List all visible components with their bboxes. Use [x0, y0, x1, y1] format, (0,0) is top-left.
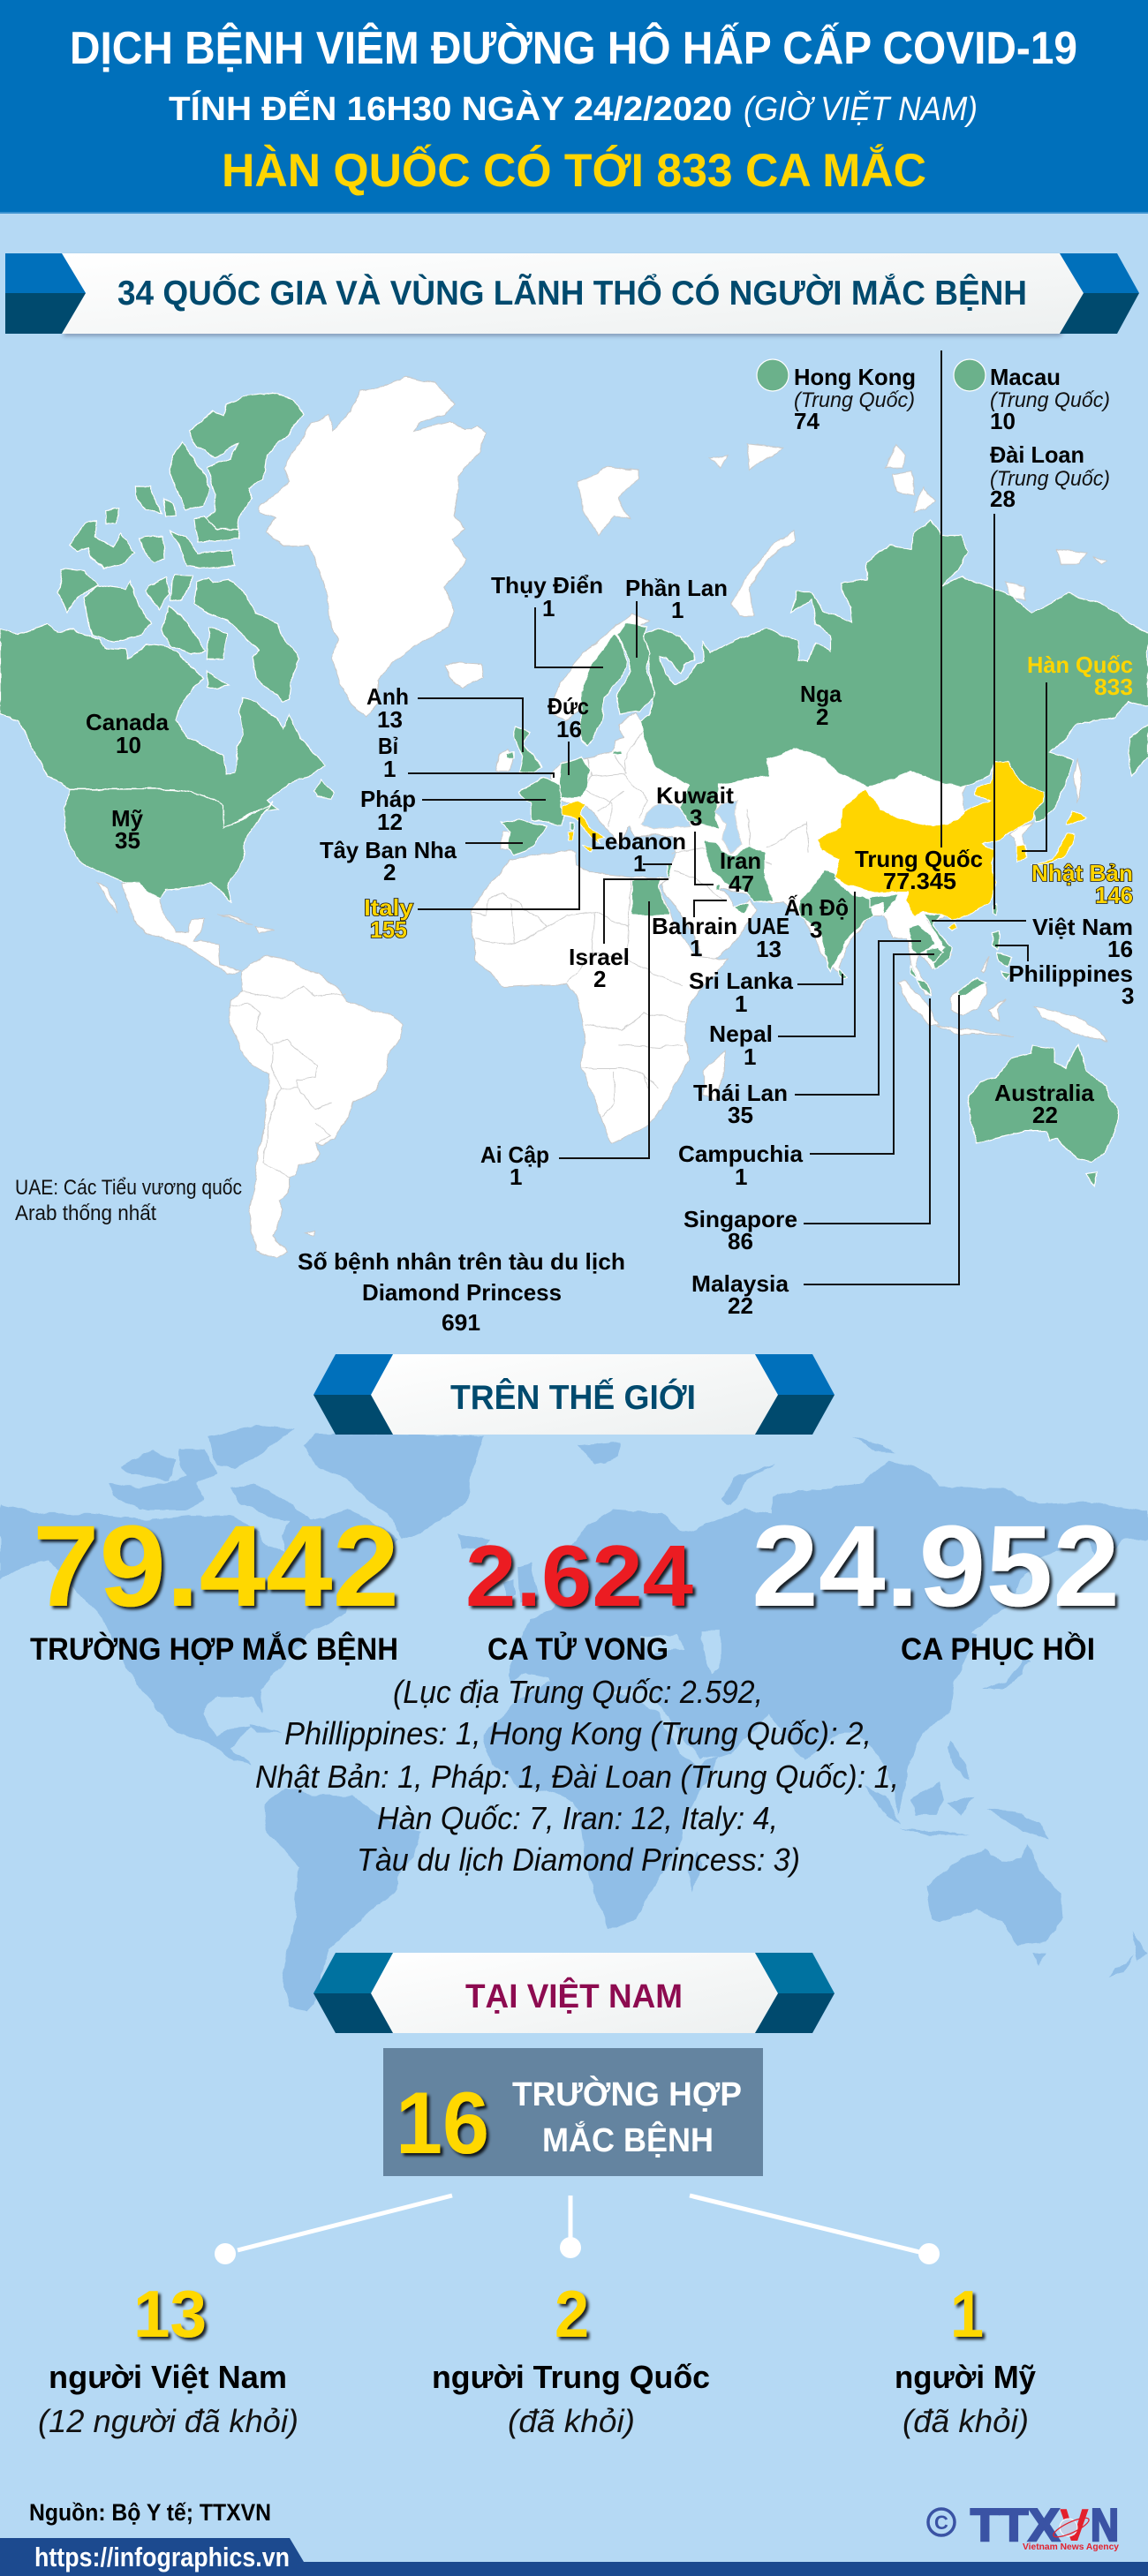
label: Philippines: 3	[1122, 983, 1134, 1009]
label: Diamond Princess	[298, 1248, 625, 1336]
label: Đài Loan	[990, 441, 1110, 909]
label: Canada	[86, 709, 170, 758]
subtitle date: TÍNH ĐẾN 16H30 NGÀY 24/2/2020	[169, 89, 732, 128]
label: Ai Cập: Ai Cập	[480, 1141, 549, 1168]
label: Italy: 155	[370, 916, 407, 943]
label: Đức: 16	[556, 716, 582, 742]
label: Macau	[954, 359, 1110, 434]
label: Mỹ	[111, 805, 144, 854]
label: Israel: Israel	[569, 944, 630, 970]
label: Nhật Bản: 146	[1095, 882, 1133, 908]
Black Sea	[642, 803, 691, 830]
logo: TTXVN: C	[934, 2512, 948, 2534]
header band	[0, 0, 1148, 214]
label: Tây Ban Nha: 2	[383, 859, 396, 885]
label: Pháp: Pháp	[360, 786, 416, 812]
map labels	[15, 350, 1134, 1336]
stat: total cases: TRƯỜNG HỢP MẮC BỆNH	[30, 1631, 398, 1667]
section banner: Vietnam	[313, 1953, 835, 2033]
label: Việt Nam	[932, 914, 1133, 962]
breakdown: Chinese	[432, 2277, 710, 2439]
section banner: world	[313, 1354, 835, 1435]
label: Trung Quốc: Trung Quốc	[855, 846, 983, 872]
label: Hàn Quốc	[1022, 652, 1133, 851]
logo: TTXVN: Vietnam News Agency	[1023, 2542, 1119, 2552]
label: Việt Nam: 16	[1107, 936, 1133, 962]
note: UAE abbreviation: Arab thống nhất	[15, 1201, 156, 1225]
label: Phần Lan: Phần Lan	[625, 575, 728, 601]
label: Macau: (Trung Quốc)	[990, 388, 1110, 412]
label: Nepal: 1	[744, 1043, 756, 1070]
India, Southeast Asia, Taiwan	[799, 870, 1013, 998]
stat: deaths: 2.624	[465, 1527, 693, 1624]
label: Diamond Princess: Diamond Princess	[362, 1279, 562, 1306]
label: Thái Lan: 35	[728, 1102, 753, 1128]
Finland	[616, 623, 655, 715]
label: Iran	[720, 847, 761, 897]
label: Bỉ: 1	[383, 756, 396, 782]
stat: total cases: 79.442	[33, 1501, 399, 1631]
label: Singapore: Singapore	[684, 1206, 797, 1232]
breakdown: Vietnamese: 13	[133, 2277, 207, 2351]
label: Ai Cập: 1	[510, 1164, 522, 1190]
subtitle date	[169, 89, 978, 128]
label: Hong Kong: (Trung Quốc)	[794, 388, 915, 412]
stat: deaths	[465, 1527, 693, 1667]
United States	[64, 789, 273, 902]
label: Lebanon	[591, 828, 686, 877]
UK, Germany, France, Spain, Egypt, Iran	[502, 727, 773, 915]
label: Diamond Princess: Số bệnh nhân trên tàu du lịch	[298, 1248, 625, 1275]
label: UAE: UAE	[747, 913, 789, 939]
label: Lebanon: Lebanon	[591, 828, 686, 855]
label: Đài Loan: Đài Loan	[990, 441, 1084, 468]
label: Anh: 13	[377, 706, 403, 733]
label: Bỉ	[378, 733, 554, 782]
label: Kuwait: 3	[690, 804, 702, 831]
label: Kuwait	[656, 782, 734, 885]
breakdown: Vietnamese: người Việt Nam	[49, 2359, 287, 2395]
breakdown: Chinese: (đã khỏi)	[508, 2403, 635, 2439]
breakdown: American	[895, 2277, 1036, 2439]
breakdown: Vietnamese	[38, 2277, 298, 2439]
label: Anh	[366, 683, 523, 752]
breakdown: Vietnamese: (12 người đã khỏi)	[38, 2403, 298, 2439]
deaths breakdown: Hàn Quốc: 7, Iran: 12, Italy: 4,	[377, 1800, 778, 1836]
label: Mỹ: Mỹ	[111, 805, 144, 832]
Italy	[563, 801, 605, 852]
label: Pháp: 12	[377, 809, 403, 835]
label: Macau: 10	[990, 408, 1016, 434]
section banner: 34 countries: 34 QUỐC GIA VÀ VÙNG LÃNH THỔ CÓ NGƯỜI MẮC BỆNH	[117, 273, 1027, 313]
white land	[97, 377, 1106, 1260]
label: Thái Lan	[693, 941, 921, 1128]
label: Nga	[800, 681, 842, 730]
label: Sri Lanka: Sri Lanka	[689, 968, 794, 994]
deaths breakdown: Phillippines: 1, Hong Kong (Trung Quốc): 2,	[284, 1715, 872, 1751]
deaths breakdown: Tàu du lịch Diamond Princess: 3)	[357, 1842, 800, 1878]
stat: deaths: CA TỬ VONG	[487, 1631, 668, 1667]
total box: 16 cases: 16	[396, 2074, 489, 2172]
label: Bahrain	[652, 900, 737, 961]
label: Italy: Italy	[364, 894, 414, 921]
label: Australia	[994, 1080, 1095, 1128]
label: Đức	[548, 693, 589, 775]
label: Pháp	[360, 786, 546, 835]
label: Ấn Độ	[784, 894, 849, 943]
label: Bỉ: Bỉ	[378, 733, 398, 759]
label: Bahrain: Bahrain	[652, 913, 737, 939]
world map	[0, 377, 1148, 1260]
Russia	[640, 519, 1148, 828]
country borders	[230, 733, 810, 1177]
label: Malaysia: 22	[728, 1292, 753, 1319]
logo: TTXVN: N	[1091, 2500, 1119, 2551]
section banner: Vietnam: TẠI VIỆT NAM	[465, 1977, 683, 2015]
breakdown: Chinese: người Trung Quốc	[432, 2359, 710, 2395]
label: Ấn Độ: Ấn Độ	[784, 894, 849, 921]
label: Hàn Quốc: 833	[1094, 674, 1133, 700]
label: Hong Kong	[757, 359, 916, 434]
Canada and islands	[0, 392, 333, 828]
note: UAE abbreviation: UAE: Các Tiểu vương quốc	[15, 1176, 242, 1200]
Caspian Sea	[715, 801, 742, 852]
label: Israel: 2	[593, 966, 606, 992]
note: UAE abbreviation	[15, 1176, 242, 1225]
breakdown: American: người Mỹ	[895, 2359, 1036, 2395]
label: Malaysia: Malaysia	[691, 1270, 789, 1297]
label: UAE: 13	[756, 936, 782, 962]
label: Bahrain: 1	[690, 935, 702, 961]
label: Tây Ban Nha	[320, 837, 523, 885]
breakdown: American: (đã khỏi)	[903, 2403, 1029, 2439]
label: Malaysia	[691, 995, 959, 1319]
countries with cases	[0, 392, 1148, 1186]
total box: 16 cases: MẮC BỆNH	[542, 2120, 714, 2159]
logo: TTXVN: TTX	[971, 2500, 1060, 2551]
footer bar with URL	[0, 2538, 1148, 2576]
label: Singapore	[684, 998, 930, 1254]
stat: recovered: CA PHỤC HỒI	[901, 1631, 1095, 1667]
label: Philippines: Philippines	[1008, 960, 1133, 987]
label: Hong Kong: Hong Kong	[794, 364, 916, 390]
deaths breakdown	[255, 1674, 899, 1878]
label: Israel	[569, 879, 668, 992]
label: Hàn Quốc: Hàn Quốc	[1027, 652, 1133, 678]
label: Nga: Nga	[800, 681, 842, 707]
section banner: 34 countries	[5, 253, 1139, 334]
world map watermark	[0, 1425, 1148, 2013]
breakdown: American: 1	[950, 2277, 984, 2351]
label: Philippines	[995, 945, 1134, 1009]
label: Campuchia	[678, 954, 934, 1190]
label: Anh: Anh	[366, 683, 409, 710]
deaths breakdown: Nhật Bản: 1, Pháp: 1, Đài Loan (Trung Quốc): 1,	[255, 1759, 899, 1795]
label: UAE	[747, 913, 789, 962]
label: Kuwait: Kuwait	[656, 782, 734, 809]
label: Thụy Điển	[491, 572, 603, 667]
label: Italy	[364, 817, 579, 943]
label: Canada: Canada	[86, 709, 170, 735]
label: Nhật Bản: Nhật Bản	[1031, 860, 1133, 886]
label: Trung Quốc: 77.345	[883, 868, 956, 894]
label: Đài Loan: 28	[990, 486, 1016, 512]
label: Thụy Điển: 1	[542, 595, 555, 621]
label: Campuchia: Campuchia	[678, 1141, 804, 1167]
label: Hong Kong: 74	[794, 408, 819, 434]
label: Sri Lanka	[689, 968, 842, 1017]
footer bar with URL: https://infographics.vn	[34, 2542, 290, 2572]
label: Thái Lan: Thái Lan	[693, 1080, 788, 1106]
China, South Korea, Japan	[817, 762, 1086, 931]
label: Tây Ban Nha: Tây Ban Nha	[320, 837, 457, 863]
label: Australia: Australia	[994, 1080, 1095, 1106]
label: Macau: Macau	[990, 364, 1061, 390]
label: Sri Lanka: 1	[735, 990, 747, 1017]
source: Nguồn: Bộ Y tế; TTXVN	[29, 2499, 271, 2526]
deaths breakdown: (Lục địa Trung Quốc: 2.592,	[393, 1674, 763, 1710]
label: Singapore: 86	[728, 1228, 753, 1254]
label: Mỹ: 35	[115, 827, 140, 854]
label: Thụy Điển: Thụy Điển	[491, 572, 603, 599]
label: Lebanon: 1	[633, 850, 646, 877]
label: Phần Lan: 1	[671, 597, 684, 623]
label: Ấn Độ: 3	[810, 916, 822, 943]
subtitle date: (GIỜ VIỆT NAM)	[744, 90, 978, 128]
Australia	[968, 1044, 1118, 1186]
total box: 16 cases	[383, 2048, 763, 2176]
logo: TTXVN: V	[1060, 2500, 1089, 2551]
total box: 16 cases: TRƯỜNG HỢP	[512, 2075, 742, 2113]
label: Phần Lan	[625, 575, 728, 658]
label: Canada: 10	[116, 732, 141, 758]
label: Đức: Đức	[548, 693, 589, 719]
label: Đài Loan: (Trung Quốc)	[990, 467, 1110, 491]
Sweden	[581, 634, 627, 747]
label: Nga: 2	[816, 704, 828, 730]
label: Ai Cập	[480, 901, 649, 1190]
label: Nhật Bản	[1031, 860, 1133, 908]
headline: HÀN QUỐC CÓ TỚI 833 CA MẮC	[222, 143, 926, 197]
breakdown: Chinese: 2	[555, 2277, 589, 2351]
section banner: world: TRÊN THẾ GIỚI	[450, 1378, 696, 1417]
label: Iran: 47	[729, 870, 754, 897]
logo: TTXVN	[928, 2500, 1119, 2552]
connector lines	[215, 2196, 940, 2264]
label: Nepal: Nepal	[709, 1021, 773, 1047]
label: Iran: Iran	[720, 847, 761, 874]
label: Diamond Princess: 691	[442, 1309, 480, 1336]
label: Nepal	[709, 892, 855, 1070]
label: Việt Nam: Việt Nam	[1032, 914, 1133, 940]
countries highlighted in yellow	[563, 762, 1086, 931]
label: Trung Quốc	[855, 350, 983, 894]
title: DỊCH BỆNH VIÊM ĐƯỜNG HÔ HẤP CẤP COVID-19	[70, 22, 1077, 74]
stat: recovered: 24.952	[751, 1501, 1120, 1631]
label: Australia: 22	[1032, 1102, 1058, 1128]
label: Campuchia: 1	[735, 1164, 747, 1190]
